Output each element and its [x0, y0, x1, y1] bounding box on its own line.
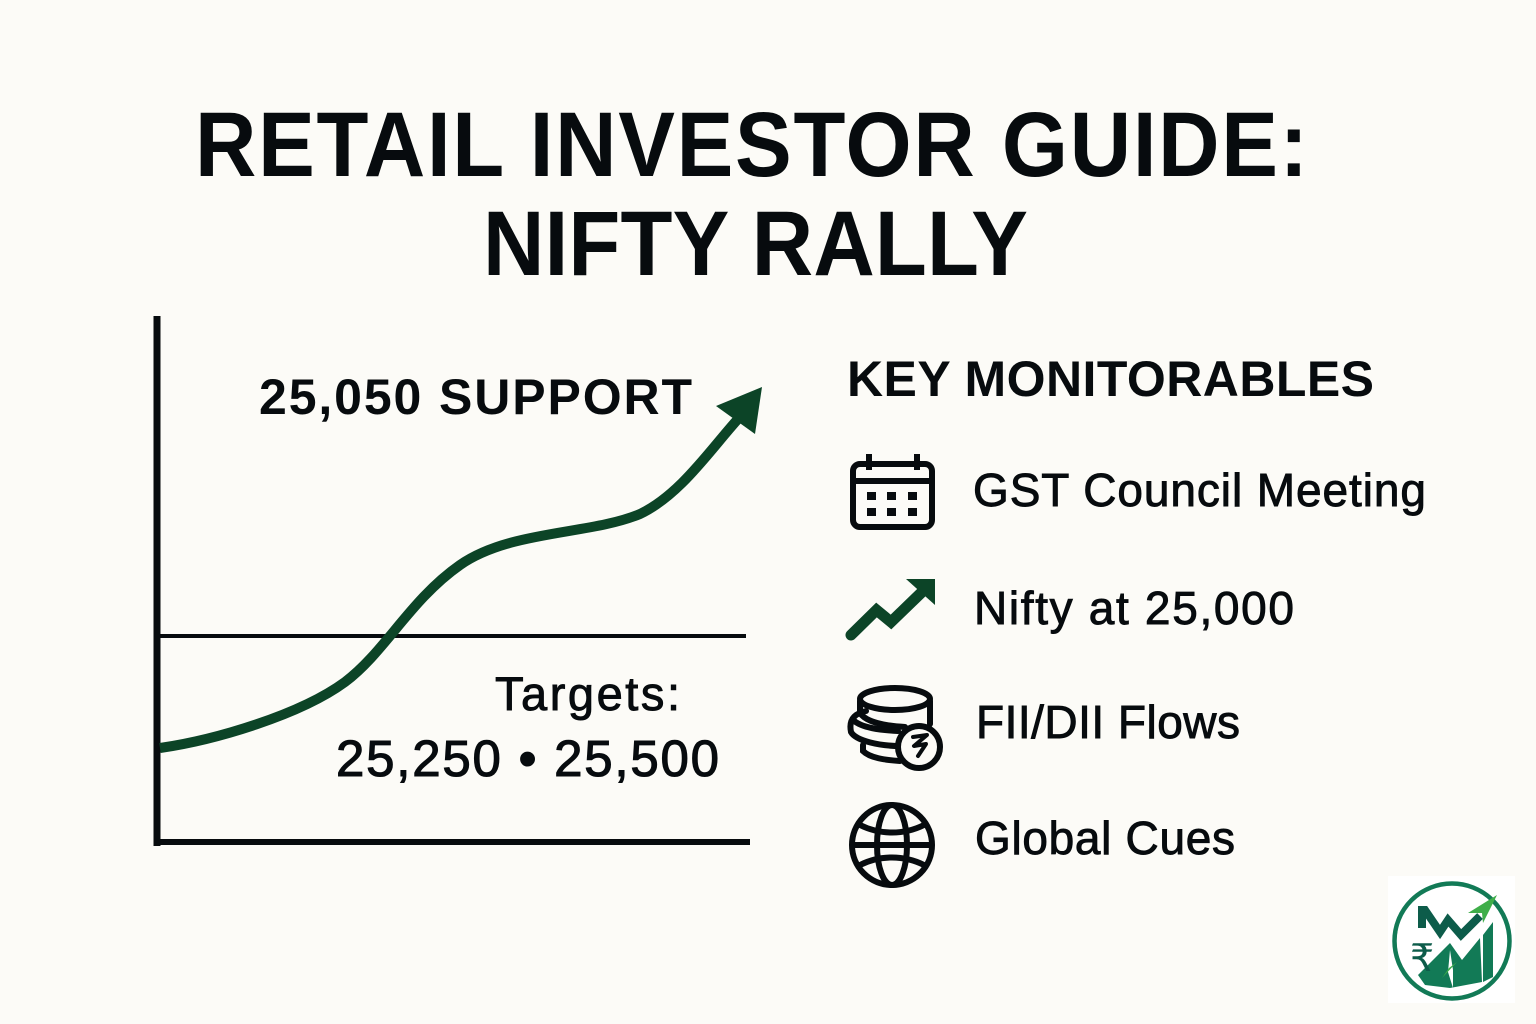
title — [195, 93, 1308, 295]
logo arrow head — [1468, 895, 1497, 923]
line chart — [154, 316, 762, 846]
arrow head — [716, 387, 762, 434]
icon: globe — [852, 805, 932, 885]
heading: KEY MONITORABLES — [847, 351, 1374, 407]
icon: calendar — [853, 454, 932, 527]
rising green curve — [160, 419, 738, 748]
title: NIFTY RALLY — [483, 192, 1028, 295]
icon: coins with rupee — [850, 688, 940, 768]
y axis — [154, 316, 160, 846]
targets label: Targets: — [495, 667, 680, 720]
targets label: 25,250 • 25,500 — [336, 730, 719, 787]
logo rupee: ₹ — [1410, 936, 1434, 980]
support level line — [157, 634, 746, 638]
key monitorables panel — [847, 351, 1426, 885]
item text: Global Cues: Global Cues — [975, 812, 1235, 864]
logo — [1388, 876, 1515, 1003]
x axis — [154, 839, 750, 845]
targets label — [336, 667, 719, 787]
icon: trend arrow — [851, 579, 935, 635]
item text: FII/DII Flows: FII/DII Flows — [976, 696, 1240, 748]
support label: 25,050 SUPPORT — [259, 369, 692, 425]
logo bar — [1483, 922, 1493, 982]
logo mountain — [1418, 938, 1482, 988]
item text: Nifty at 25,000: Nifty at 25,000 — [974, 582, 1294, 634]
title: RETAIL INVESTOR GUIDE: — [195, 93, 1308, 196]
logo M zigzag — [1422, 910, 1480, 935]
logo compass needle — [1448, 950, 1453, 988]
item text: GST Council Meeting: GST Council Meeting — [973, 464, 1426, 516]
